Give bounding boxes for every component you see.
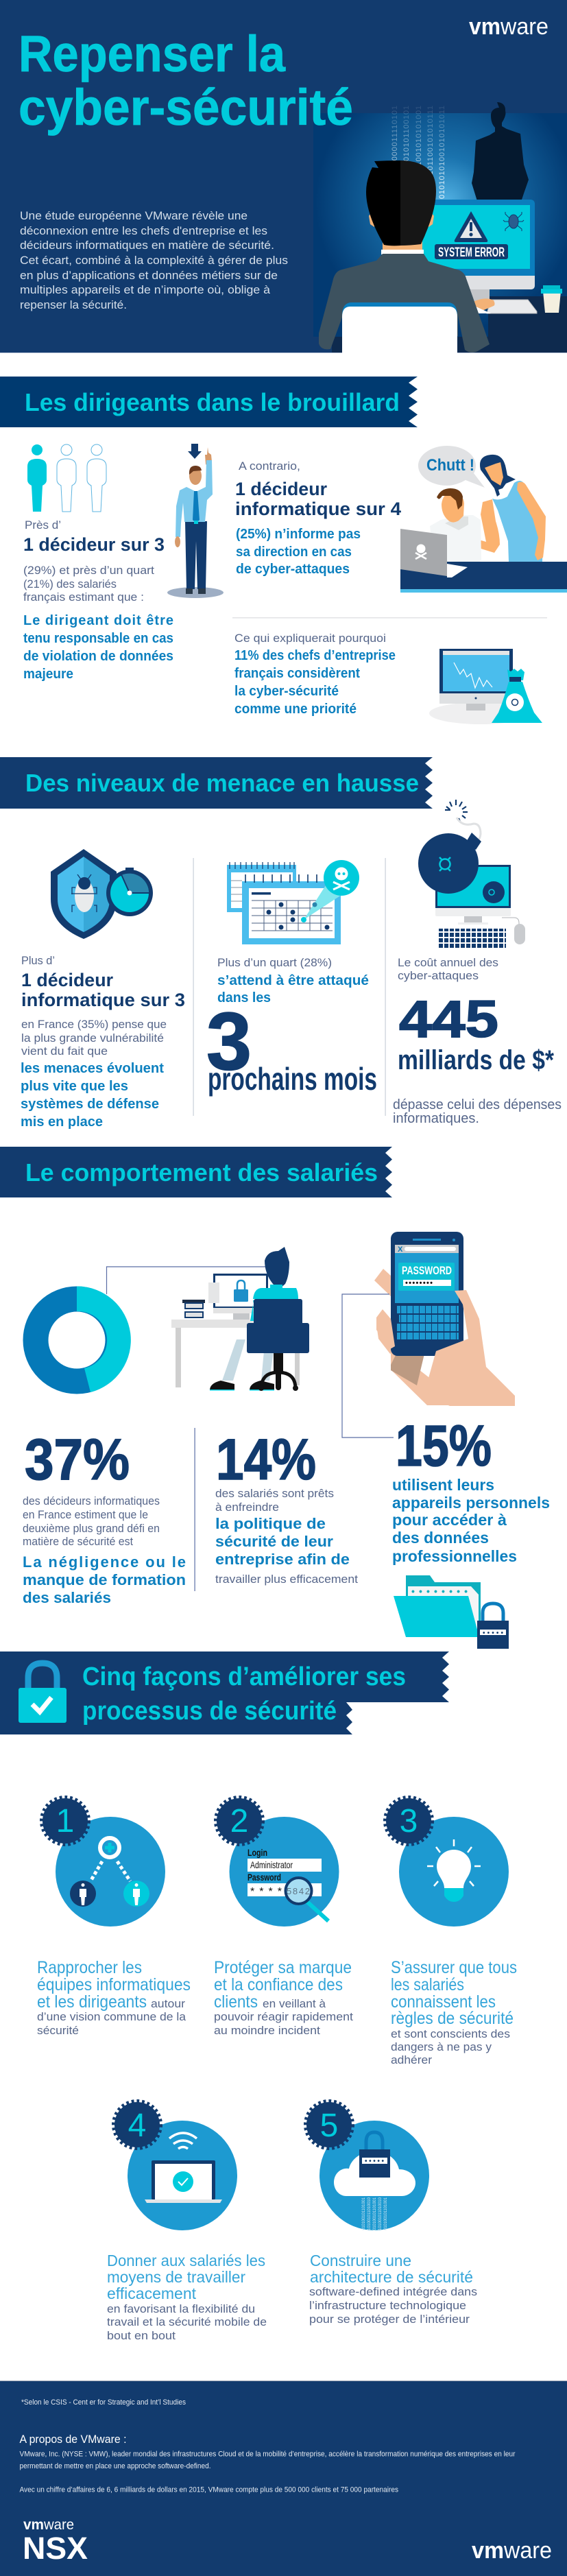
panel: 11% chefs d'entreprise: français considèrent — [234, 666, 360, 681]
binary code columns: 10010101100101010111 — [426, 106, 435, 199]
about text — [19, 2450, 516, 2494]
text: clients — [214, 1992, 258, 2012]
panel: column 1 text: mis en place — [21, 1114, 103, 1130]
stat: 15%: des données — [392, 1529, 489, 1547]
icon: cloud with padlock: ••••• — [365, 2158, 384, 2165]
footnote: *Selon le CSIS - Cent er for Strategic and Int’l Studies — [21, 2398, 186, 2407]
panel: column 2 text — [206, 956, 377, 1097]
vmware NSX logo: ware — [43, 2517, 74, 2533]
intro text: repenser la sécurité. — [20, 298, 127, 311]
panel: column 3 text: dépasse celui des dépenses — [393, 1097, 562, 1112]
text: et sont conscients des — [391, 2027, 510, 2040]
badge 1 — [41, 1797, 89, 1845]
icon: folder with padlock: •••••••• — [411, 1586, 468, 1597]
badge 2: 2 — [230, 1803, 248, 1839]
panel: column 3 text — [393, 956, 562, 1126]
stat: 15%: utilisent leurs — [392, 1476, 494, 1494]
text: et les dirigeants — [37, 1992, 147, 2012]
sparks — [445, 800, 468, 822]
stat: 14%: la politique de — [215, 1515, 326, 1532]
panel: column 1 text: les menaces évoluent — [21, 1061, 164, 1076]
banner: cinq façons — [0, 1651, 449, 1734]
panel: column 2 text: 3 — [206, 996, 252, 1087]
panel: 1 décideur sur 3: tenu responsable en cas — [23, 631, 173, 646]
icon: cloud with padlock: 101001011010010 — [378, 2197, 383, 2230]
text: connaissent les — [391, 1992, 496, 2012]
panel: column 2 text: prochains mois — [208, 1061, 377, 1097]
icon: cloud with padlock: 101001011010010 — [367, 2197, 372, 2230]
icon: login form: **** — [250, 1886, 282, 1898]
stat: 37%: des décideurs informatiques — [23, 1494, 160, 1507]
intro text: en plus d’applications et données métiers sur de — [20, 269, 278, 282]
stat: 37%: 37% — [25, 1427, 130, 1492]
banner: comportement: Le comportement des salariés — [25, 1158, 378, 1186]
panel: 1 décideur informatique sur 4: A contrario, — [239, 460, 300, 473]
panel: column 2 text: dans les — [217, 990, 271, 1005]
title — [19, 25, 353, 136]
stat: 14%: des salariés sont prêts — [215, 1487, 334, 1500]
icon: folder with padlock — [394, 1575, 509, 1649]
text: pouvoir réagir rapidement — [214, 2010, 353, 2023]
banner: comportement — [0, 1147, 392, 1197]
icon: cloud with padlock: 010100101101001 — [362, 2197, 366, 2230]
panel: 1 décideur informatique sur 4: informatique sur 4 — [235, 499, 401, 519]
intro text: décideurs informatiques en matière de sécurité. — [20, 239, 274, 252]
panel: column 1 text — [21, 954, 185, 1130]
panel: 11% chefs d'entreprise: Ce qui expliquerait pourquoi — [234, 632, 386, 645]
badge 5 — [306, 2101, 352, 2148]
text: pour se protéger de l’intérieur — [309, 2313, 470, 2326]
text: software-defined intégrée dans — [309, 2285, 477, 2298]
vmware logo: ware — [500, 14, 548, 40]
vmware NSX logo — [23, 2517, 88, 2566]
panel: 1 décideur informatique sur 4 — [235, 460, 401, 577]
panel: 1 décideur informatique sur 4: 1 décideur — [235, 479, 327, 499]
stat: 15%: appareils personnels — [392, 1494, 550, 1512]
vmware logo bottom: ware — [503, 2538, 552, 2564]
panel: column 3 text: 445 — [399, 990, 498, 1049]
panel: 11% chefs d'entreprise: la cyber-sécurité — [234, 684, 339, 699]
vmware logo bottom: vm — [472, 2538, 504, 2564]
stat: 14%: travailler plus efficacement — [215, 1573, 358, 1586]
text: en favorisant la flexibilité du — [107, 2302, 255, 2315]
badge 3: 3 — [400, 1803, 418, 1839]
banner: dirigeants: Les dirigeants dans le brouillard — [25, 388, 400, 416]
step 2 — [214, 1797, 353, 2037]
text: S’assurer que tous — [391, 1958, 517, 1977]
text: adhérer — [391, 2053, 432, 2066]
icon: login form: Login — [248, 1847, 267, 1858]
stat: 15%: 15% — [396, 1414, 492, 1478]
text — [309, 2252, 477, 2326]
intro text — [20, 209, 288, 311]
badge 4: 4 — [128, 2108, 146, 2144]
man seen from behind — [319, 160, 490, 353]
icon: shield and stopwatch — [51, 849, 153, 939]
vmware logo: vm — [469, 14, 500, 40]
panel: column 1 text: vient du fait que — [21, 1045, 108, 1058]
stat: 14%: sécurité de leur — [215, 1533, 333, 1550]
icon: login form: Administrator — [250, 1859, 293, 1870]
intro text: multiples appareils et de n’importe où, oblige à — [20, 283, 271, 296]
icon: login form: Password — [248, 1872, 281, 1883]
icon: folder with padlock: ••••• — [483, 1630, 503, 1637]
man at laptop — [430, 488, 481, 564]
panel: column 1 text: 1 décideur — [21, 970, 113, 990]
panel: column 2 text: s’attend à être attaqué — [217, 973, 369, 988]
panel: 1 décideur informatique sur 4: de cyber-attaques — [236, 562, 350, 577]
icon: person at desk — [171, 1247, 309, 1391]
text: règles de sécurité — [391, 2009, 514, 2028]
banner: dirigeants — [0, 377, 418, 427]
icon: cloud with padlock: 010100101101001 — [373, 2197, 377, 2230]
panel: column 1 text: systèmes de défense — [21, 1097, 159, 1112]
text: l’infrastructure technologique — [309, 2299, 466, 2312]
panel: 1 décideur sur 3: 1 décideur sur 3 — [23, 534, 165, 555]
text — [391, 1958, 517, 2066]
panel: 1 décideur sur 3: Près d’ — [25, 518, 61, 532]
desk — [400, 562, 567, 589]
panel: column 1 text: informatique sur 3 — [21, 990, 185, 1010]
panel: column 1 text: en France (35%) pense que — [21, 1018, 167, 1031]
stat: 37%: en France estiment que le — [23, 1508, 148, 1521]
step 5 — [306, 2101, 477, 2326]
stat: 14%: 14% — [216, 1427, 316, 1492]
text: Protéger sa marque — [214, 1958, 352, 1977]
text: efficacement — [107, 2285, 197, 2302]
text: d’une vision commune de la — [37, 2010, 186, 2023]
text: sécurité — [37, 2024, 79, 2037]
panel: 1 décideur sur 3: (29%) et près d’un quart — [23, 564, 154, 577]
icon: login form — [248, 1847, 328, 1921]
intro text: déconnexion entre les chefs d'entreprise et les — [20, 224, 267, 237]
text: et la confiance des — [214, 1975, 343, 1994]
stat: 37%: La négligence ou le — [23, 1553, 186, 1571]
panel: 11% chefs d'entreprise: 11% des chefs d’entreprise — [234, 648, 396, 663]
binary code columns: 01010101001010101011 — [438, 106, 446, 199]
banner: menace — [0, 757, 433, 809]
binary code columns — [391, 106, 446, 199]
speech bubble — [418, 446, 485, 488]
panel: column 3 text: informatiques. — [393, 1111, 479, 1126]
stat: 15%: pour accéder à — [392, 1511, 507, 1529]
text: dangers à ne pas y — [391, 2040, 492, 2053]
badge 1: 1 — [56, 1803, 74, 1839]
text: Construire une — [310, 2252, 411, 2269]
vmware NSX logo: NSX — [23, 2531, 88, 2566]
step 4 — [107, 2101, 267, 2342]
banner: cinq façons: Cinq façons d’améliorer ses — [82, 1662, 406, 1691]
vmware logo — [469, 14, 548, 40]
badge 3 — [385, 1797, 432, 1845]
about text: permettant de mettre en place une approche software-defined. — [19, 2462, 211, 2470]
system error label — [435, 244, 508, 260]
icon: bomb over computer — [418, 800, 525, 949]
text: au moindre incident — [214, 2024, 320, 2037]
about heading: A propos de VMware : — [19, 2433, 126, 2446]
text: travail et la sécurité mobile de — [107, 2315, 267, 2328]
badge 5: 5 — [320, 2108, 338, 2144]
panel: 1 décideur sur 3: français estimant que : — [23, 591, 144, 604]
icon: hand holding phone: •••••••• — [405, 1279, 433, 1287]
panel: column 3 text: cyber-attaques — [398, 969, 479, 982]
stat: 37% — [23, 1427, 186, 1606]
icon: monitor and money bag — [429, 649, 542, 724]
stat: 14%: à enfreindre — [215, 1501, 279, 1514]
panel: column 2 text: Plus d’un quart (28%) — [217, 956, 332, 969]
chart: donut 37% — [36, 1286, 131, 1392]
panel: column 1 text: la plus grande vulnérabilité — [21, 1031, 164, 1045]
vmware logo bottom — [472, 2538, 552, 2564]
binary code columns: 10101010010101100101 — [402, 106, 411, 199]
panel: column 1 text: plus vite que les — [21, 1079, 128, 1094]
icon: three people — [27, 444, 106, 512]
panel: 1 décideur sur 3: de violation de données — [23, 649, 173, 664]
coffee cup — [541, 285, 562, 313]
silhouette figure — [472, 102, 529, 235]
keyboard and hand — [473, 298, 537, 313]
panel: 1 décideur informatique sur 4: (25%) n’informe pas — [236, 527, 361, 542]
text — [107, 2252, 267, 2342]
vmware NSX logo: vm — [23, 2517, 44, 2533]
text: Donner aux salariés les — [107, 2252, 265, 2269]
binary code columns: 10100101000011110101 — [391, 106, 399, 199]
system error label: SYSTEM ERROR — [438, 246, 505, 260]
stat: 37%: deuxième plus grand défi en — [23, 1522, 160, 1535]
stat: 37%: des salariés — [23, 1589, 111, 1606]
icon: wifi laptop — [145, 2133, 222, 2203]
text — [37, 1958, 191, 2037]
stat: 15%: professionnelles — [392, 1547, 517, 1565]
intro text: Cet écart, combiné à la complexité à gérer de plus — [20, 254, 288, 267]
stat: 14%: entreprise afin de — [215, 1551, 350, 1568]
stat: 37%: manque de formation — [23, 1571, 186, 1588]
panel: column 1 text: Plus d’ — [21, 954, 55, 967]
panel: 1 décideur sur 3: (21%) des salariés — [23, 577, 117, 591]
icon: team links — [70, 1838, 149, 1907]
banner: menace: Des niveaux de menace en hausse — [25, 769, 419, 797]
speech bubble: Chutt ! — [426, 456, 474, 475]
panel: 1 décideur sur 3 — [23, 444, 173, 682]
icon: padlock with check — [19, 1663, 67, 1723]
text: équipes informatiques — [37, 1975, 191, 1994]
badge 4 — [114, 2101, 160, 2148]
icon: warning triangle — [455, 211, 487, 242]
monitor with system error — [422, 200, 535, 305]
icon: light bulb — [427, 1839, 481, 1902]
text — [214, 1958, 353, 2037]
icon: login form: 5842 — [287, 1886, 310, 1896]
icon: man pointing up — [167, 444, 224, 598]
icon: hand holding phone: X — [398, 1245, 403, 1254]
title: cyber-sécurité — [19, 79, 353, 136]
binary code columns: 01010101001010101001 — [415, 106, 423, 199]
about text: VMware, Inc. (NYSE : VMW), leader mondial des infrastructures Cloud et de la mobilité d’entreprise, accélère la transformation numérique des entreprises en leur — [19, 2450, 516, 2458]
icon: hand holding phone: PASSWORD — [402, 1264, 452, 1277]
icon: cloud with padlock: 010100101101001 — [384, 2197, 388, 2230]
panel: 11% chefs d'entreprise: comme une priorité — [234, 702, 357, 717]
text: bout en bout — [107, 2329, 176, 2342]
stat: 15% — [392, 1414, 550, 1565]
panel: 1 décideur sur 3: majeure — [23, 667, 73, 682]
step 1 — [37, 1797, 191, 2037]
panel: 1 décideur sur 3: Le dirigeant doit être — [23, 613, 173, 628]
about text: Avec un chiffre d’affaires de 6, 6 milliards de dollars en 2015, VMware compte plus de 500 000 clients et 75 000 partenaires — [19, 2485, 398, 2494]
panel: column 3 text: Le coût annuel des — [398, 956, 498, 969]
intro text: Une étude européenne VMware révèle une — [20, 209, 248, 222]
step 3 — [385, 1797, 517, 2066]
text: en veillant à — [263, 1997, 326, 2010]
text: Rapprocher les — [37, 1958, 142, 1977]
title: Repenser la — [19, 25, 286, 82]
text: architecture de sécurité — [310, 2268, 473, 2286]
header panel — [0, 0, 567, 353]
laptop with skull — [400, 529, 468, 577]
banner: cinq façons: processus de sécurité — [82, 1697, 337, 1726]
footer panel — [0, 2381, 567, 2576]
text: les salariés — [391, 1975, 464, 1994]
text: autour — [151, 1997, 185, 2010]
stat: 14% — [215, 1427, 358, 1586]
woman — [467, 455, 546, 562]
badge 2 — [215, 1797, 263, 1845]
illustration: chutt scene — [400, 446, 567, 593]
stat: 37%: matière de sécurité est — [23, 1535, 133, 1548]
icon: bug — [503, 212, 524, 231]
panel: 11% chefs d'entreprise — [234, 632, 396, 717]
panel: 1 décideur informatique sur 4: sa direction en cas — [236, 545, 352, 560]
icon: calendars with skull — [227, 860, 359, 944]
icon: cloud with padlock — [334, 2132, 415, 2230]
text: moyens de travailler — [107, 2268, 245, 2286]
icon: hand holding phone — [374, 1232, 515, 1406]
